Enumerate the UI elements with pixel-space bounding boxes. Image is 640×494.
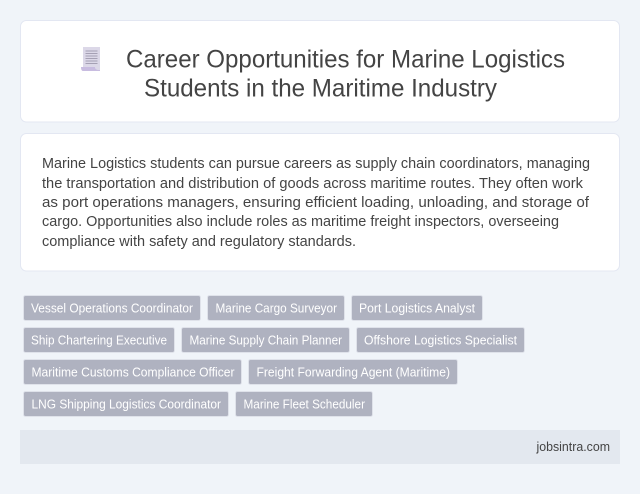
footer bar — [20, 430, 620, 464]
tag: Maritime Customs Compliance Officer — [24, 360, 242, 384]
panel: description — [20, 134, 620, 271]
tag: Port Logistics Analyst: Port Logistics Analyst — [359, 302, 476, 316]
panel: title header — [20, 20, 620, 122]
tag list — [24, 296, 524, 416]
tag: Freight Forwarding Agent (Maritime): Freight Forwarding Agent (Maritime) — [256, 366, 450, 380]
tag: Vessel Operations Coordinator — [24, 296, 200, 320]
description text: the transportation and distribution of goods across maritime routes. They often work — [42, 175, 583, 192]
tag: LNG Shipping Logistics Coordinator — [24, 392, 228, 416]
tag: Marine Supply Chain Planner — [182, 328, 350, 352]
tag: Vessel Operations Coordinator: Vessel Operations Coordinator — [31, 302, 193, 316]
tag: Ship Chartering Executive — [24, 328, 174, 352]
description text: as port operations managers, ensuring efficient loading, unloading, and storage of — [42, 194, 590, 211]
tag: Marine Cargo Surveyor: Marine Cargo Surveyor — [216, 302, 337, 316]
tag: Marine Fleet Scheduler: Marine Fleet Scheduler — [244, 398, 365, 412]
tag: Marine Supply Chain Planner: Marine Supply Chain Planner — [190, 334, 342, 348]
tag: Maritime Customs Compliance Officer: Maritime Customs Compliance Officer — [32, 366, 234, 380]
tag: Marine Cargo Surveyor — [208, 296, 344, 320]
description text — [42, 155, 590, 250]
tag: Offshore Logistics Specialist: Offshore Logistics Specialist — [364, 334, 518, 348]
tag: Offshore Logistics Specialist — [356, 328, 524, 352]
title: Career Opportunities for Marine Logistics — [126, 46, 565, 74]
tag: Ship Chartering Executive: Ship Chartering Executive — [31, 334, 167, 348]
tag: Freight Forwarding Agent (Maritime) — [248, 360, 458, 384]
tag: Port Logistics Analyst — [352, 296, 482, 320]
footer source text: jobsintra.com — [536, 440, 610, 454]
title: Students in the Maritime Industry — [144, 74, 497, 102]
description text: compliance with safety and regulatory standards. — [42, 233, 356, 250]
description text: Marine Logistics students can pursue careers as supply chain coordinators, managing — [42, 155, 590, 172]
tag: LNG Shipping Logistics Coordinator: LNG Shipping Logistics Coordinator — [32, 398, 221, 412]
tag: Marine Fleet Scheduler — [236, 392, 372, 416]
icon: document scroll — [81, 47, 100, 71]
title — [126, 46, 565, 102]
description text: cargo. Opportunities also include roles as maritime freight inspectors, overseeing — [42, 213, 559, 230]
